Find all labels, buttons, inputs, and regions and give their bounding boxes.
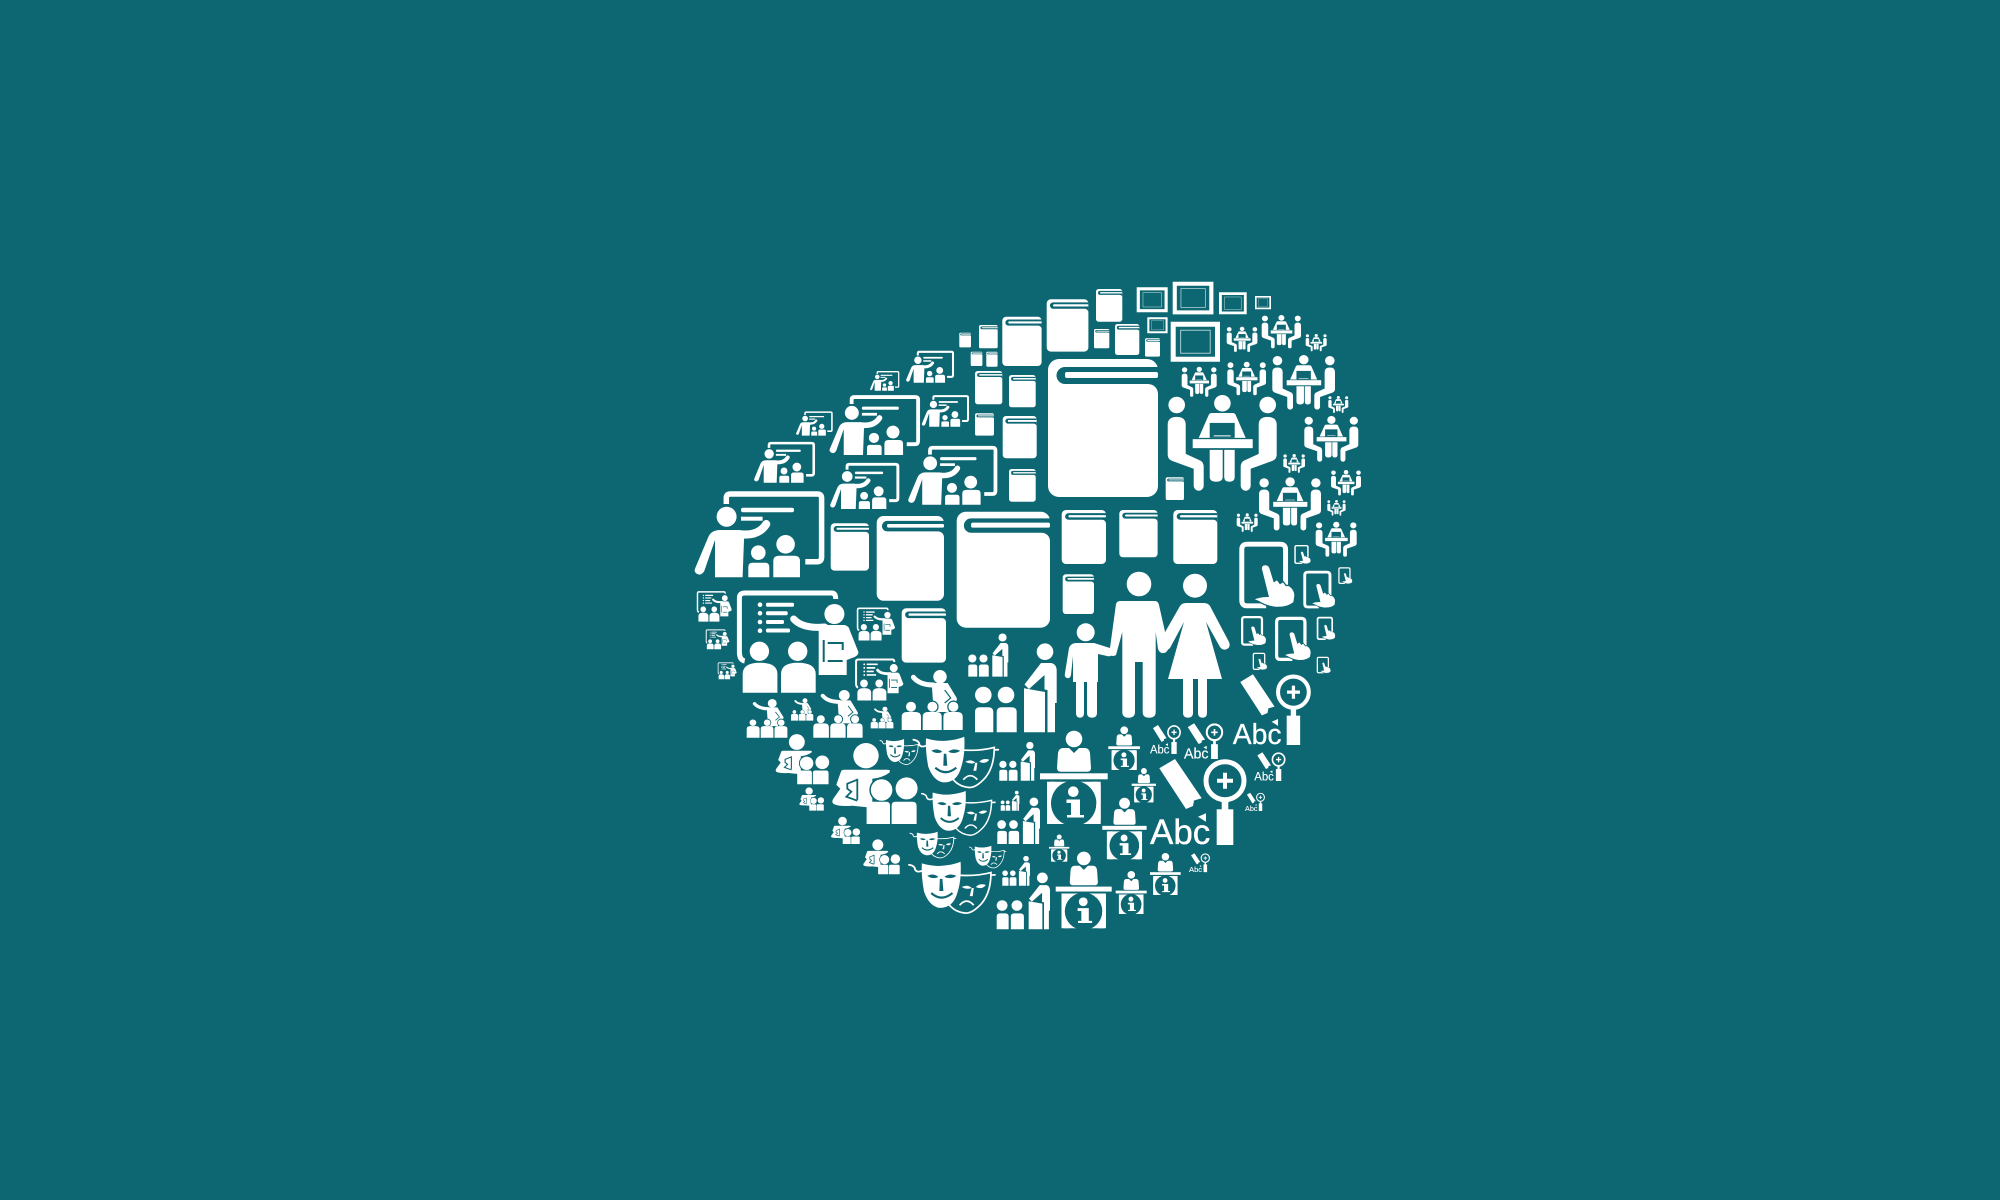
group: picture frames [1137, 282, 1271, 362]
icon: information desk [1116, 871, 1147, 915]
icon: book [1173, 510, 1217, 564]
icon: masks [910, 832, 956, 858]
icon: lecturer [968, 633, 1008, 677]
icon: presenter [747, 699, 787, 738]
icon: teacher [870, 372, 899, 391]
icon: meeting [1259, 477, 1321, 530]
icon: book [959, 333, 971, 347]
group: dictionary magnifiers [1150, 674, 1309, 874]
icon: frame [1219, 292, 1247, 314]
icon: meeting [1237, 513, 1258, 532]
icon: tablet [1318, 618, 1335, 640]
icon: teacher [754, 443, 814, 483]
icon: tablet [1242, 544, 1295, 607]
icon: frame [1137, 287, 1168, 312]
icon: list teacher [718, 663, 737, 679]
icon: book [979, 325, 998, 348]
icon: teacher [906, 352, 953, 383]
icon: book [1119, 510, 1158, 557]
icon: tablet [1305, 572, 1335, 608]
icon: presenter [791, 698, 813, 721]
icon: magnifier with Abc: Abc [1254, 772, 1274, 784]
icon: tablet [1242, 617, 1266, 645]
icon: magnifier with Abc [1232, 674, 1311, 751]
icon: magnifier with Abc: Abc [1150, 813, 1210, 852]
icon: meeting [1331, 470, 1361, 495]
icon: meeting [1262, 315, 1301, 348]
icon: book [975, 371, 1002, 404]
group: lecturers [968, 633, 1057, 929]
icon: book [1009, 375, 1036, 407]
icon: meeting [1306, 334, 1327, 351]
icon: book [831, 523, 869, 571]
icon: magnifier with Abc: Abc [1245, 804, 1258, 813]
icon: book [986, 352, 998, 367]
icon: list teacher [739, 593, 858, 693]
icon: teacher [695, 494, 822, 577]
icon: teacher [830, 397, 918, 455]
icon: tablet [1339, 568, 1352, 584]
icon: information desk [1132, 768, 1156, 803]
icon: magnifier with Abc: Abc [1233, 719, 1282, 751]
icon: information desk [1040, 731, 1108, 826]
icon: book [1094, 329, 1109, 348]
group: story readers [776, 734, 918, 874]
icon: reader [863, 839, 900, 874]
icon: lecturer [997, 798, 1040, 844]
icon: teacher [830, 464, 898, 509]
icon: magnifier with Abc: Abc [1150, 744, 1170, 757]
group: books [831, 289, 1217, 663]
icon: reader [831, 817, 860, 844]
icon: book [1063, 574, 1094, 614]
icon: book [957, 512, 1050, 628]
icon: meeting [1328, 396, 1348, 413]
icon: book [1115, 324, 1139, 355]
icon: lecturer [1001, 791, 1019, 811]
icon: book [1047, 299, 1088, 352]
icon: tablet [1277, 618, 1311, 660]
group: information desks [1040, 726, 1181, 930]
icon: information desk [1150, 853, 1181, 896]
icon: book [1145, 338, 1160, 357]
icon: frame [1173, 282, 1213, 314]
icon: meeting [1316, 522, 1357, 557]
icon: large book [1048, 359, 1158, 497]
group: meeting tables [1168, 315, 1361, 557]
icon: information desk [1108, 726, 1140, 771]
group: touch tablets [1242, 544, 1352, 673]
icon: information desk [1102, 798, 1147, 861]
icon: frame [1147, 317, 1168, 333]
icon: book [902, 608, 946, 663]
icon: list teacher [697, 592, 732, 622]
icon: book [1166, 477, 1184, 500]
icon: presenter [871, 707, 893, 728]
icon: reader [832, 743, 918, 824]
icon: magnifier with Abc: Abc [1189, 865, 1202, 874]
icon: book [971, 352, 982, 366]
icon: meeting [1182, 367, 1217, 397]
icon: meeting [1227, 362, 1266, 395]
icon: family [1065, 572, 1230, 718]
icon: magnifier with Abc [1150, 759, 1246, 852]
icon: tablet [1253, 653, 1267, 670]
icon cluster [695, 282, 1361, 930]
group: teachers at boards [695, 352, 995, 577]
icon: lecturer [1002, 856, 1030, 886]
icon: information desk [1056, 852, 1112, 930]
icon: list teacher [856, 660, 903, 700]
icon: masks [880, 739, 920, 765]
icon: meeting [1227, 327, 1257, 352]
icon: frame [1171, 322, 1220, 362]
icon: tablet [1295, 546, 1311, 564]
icon: meeting [1272, 355, 1335, 410]
icon: presenter [902, 670, 963, 730]
icon: magnifier with Abc [1150, 725, 1181, 757]
icon: lecturer [975, 643, 1057, 732]
icon: magnifier with Abc [1245, 792, 1265, 813]
icon: book [1009, 469, 1036, 502]
icon: teacher [796, 412, 832, 436]
icon: lecturer [997, 873, 1050, 929]
icon: meeting [1283, 454, 1305, 473]
icon: masks [913, 737, 998, 788]
icon: masks [922, 791, 995, 835]
icon: teacher [922, 396, 968, 427]
icon: magnifier with Abc [1254, 752, 1286, 784]
icon: list teacher [858, 608, 895, 641]
icon: meeting [1304, 416, 1358, 462]
icon: teacher [908, 448, 995, 505]
icon: meeting [1327, 500, 1346, 516]
icon: book [1096, 289, 1122, 322]
group: teachers with lists [697, 592, 903, 700]
group: theatre masks [880, 737, 1006, 913]
icon: magnifier with Abc: Abc [1184, 746, 1208, 763]
icon: magnifier with Abc [1189, 853, 1210, 874]
icon: magnifier with Abc [1184, 723, 1224, 763]
icon: presenter [813, 690, 863, 738]
icon: reader [776, 734, 829, 784]
icon: masks [969, 846, 1006, 868]
icon: frame [1255, 296, 1271, 309]
icon: book [975, 413, 994, 436]
icon: tablet [1317, 657, 1331, 673]
icon: masks [909, 862, 995, 913]
icon: book [1002, 317, 1042, 366]
icon: lecturer [999, 742, 1035, 781]
icon: book [1062, 510, 1106, 564]
icon: book [1003, 416, 1037, 458]
icon: reader [799, 787, 824, 811]
icon: book [877, 516, 944, 601]
icon: list teacher [706, 630, 729, 649]
group: presenters with audience [747, 670, 963, 738]
icon: information desk [1049, 835, 1069, 862]
icon: meeting [1168, 395, 1277, 491]
